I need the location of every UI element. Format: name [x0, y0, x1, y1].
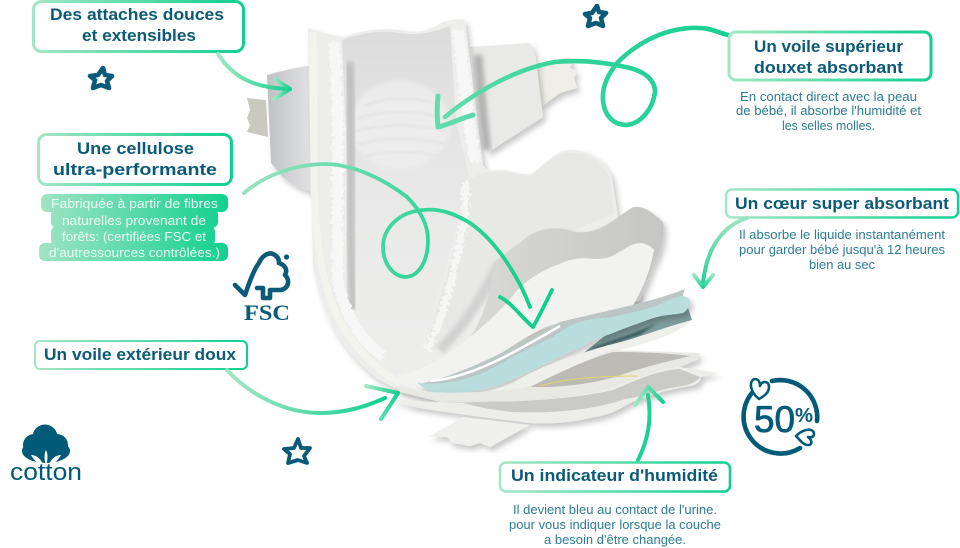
heading: Un indicateur d'humidité — [511, 467, 718, 485]
heading: Des attaches douces — [50, 6, 224, 24]
hearts — [751, 379, 814, 445]
left tab — [247, 98, 268, 137]
arrow: voile supérieur — [437, 28, 728, 127]
text block: cellulose description: forêts: (certifiées FSC et — [62, 230, 207, 244]
right tab — [535, 57, 577, 107]
text block: indicateur description: Il devient bleu au contact de l'urine. — [513, 503, 717, 517]
arrow: attaches — [218, 54, 290, 99]
grey sheet above core — [420, 289, 685, 385]
box — [38, 134, 232, 184]
left cuff shadow — [349, 62, 353, 310]
icon: 50% badge: % — [795, 405, 813, 427]
text block: voile supérieur description: les selles molles. — [782, 119, 875, 133]
cotton wordmark: cotton — [10, 459, 82, 486]
text block: cœur description — [739, 228, 946, 272]
callout: voile supérieur: douxet absorbant — [754, 59, 904, 77]
text block: cœur description: pour garder bébé jusqu'à 12 heures — [739, 243, 945, 257]
icon: star top centre — [585, 6, 606, 26]
FSC wordmark: FSC — [244, 300, 290, 325]
outer edge strip — [313, 32, 415, 390]
registered mark — [284, 254, 289, 260]
highlight sliver — [430, 326, 560, 381]
arrow: cœur — [694, 218, 747, 287]
leaves — [31, 450, 61, 466]
arrow: cellulose — [244, 164, 552, 327]
box — [500, 462, 730, 492]
green highlight — [39, 194, 228, 261]
box — [729, 32, 931, 80]
text block: cellulose description — [39, 194, 228, 261]
text block: indicateur description: pour vous indiquer lorsque la couche — [509, 518, 721, 532]
arrow: indicateur — [635, 387, 663, 460]
heading: Un voile supérieur — [754, 38, 904, 56]
text block: indicateur description: a besoin d'être changée. — [544, 533, 686, 547]
third sheet inner shadow — [530, 352, 690, 387]
box — [34, 2, 244, 52]
heading: Un voile extérieur doux — [44, 346, 237, 364]
bottom sheet inner grey — [463, 369, 700, 412]
white sheet under core — [400, 320, 692, 396]
icon: star top left — [90, 68, 112, 88]
box — [726, 190, 958, 218]
callout: attaches — [34, 2, 244, 52]
central panel — [342, 26, 470, 345]
bottom fastening tab — [429, 417, 530, 447]
valley shadow — [440, 262, 500, 350]
grey wave layer — [430, 207, 664, 385]
callout: cellulose: ultra-performante — [53, 161, 217, 179]
description text: Fabriquée à partir de fibres — [51, 197, 218, 211]
cotton boll — [22, 424, 70, 463]
bottom sheet — [383, 367, 718, 423]
embossed pad — [350, 81, 450, 169]
ring — [744, 380, 817, 453]
callout: voile supérieur — [729, 32, 931, 80]
text block: indicateur description — [509, 503, 721, 547]
callout: indicateur — [500, 462, 730, 492]
third sheet — [394, 350, 700, 402]
text block: cellulose description: naturelles provenant de — [62, 214, 206, 228]
callout: voile extérieur — [35, 341, 247, 369]
icon: star bottom — [284, 439, 310, 463]
text block: cœur description: Il absorbe le liquide instantanément — [739, 228, 946, 242]
icon: 50% badge — [744, 379, 817, 453]
callout: cellulose — [38, 134, 232, 184]
left cuff frill — [334, 42, 383, 356]
white absorbent layer — [398, 243, 654, 388]
tree mark — [235, 253, 288, 298]
text block: cœur description: bien au sec — [809, 258, 875, 272]
diaper illustration — [247, 19, 718, 447]
text block: voile supérieur description: En contact direct avec la peau — [740, 90, 917, 104]
wetness indicator line — [540, 376, 637, 386]
box — [35, 341, 247, 369]
text block: voile supérieur description — [736, 90, 922, 133]
percent value: 50 — [754, 399, 795, 440]
icon: FSC logo — [235, 253, 290, 325]
main body — [308, 19, 640, 397]
right cuff frill — [458, 30, 476, 162]
callout: attaches: et extensibles — [82, 27, 196, 45]
text block: voile supérieur description: de bébé, il absorbe l'humidité et — [736, 104, 922, 118]
callout: cœur — [726, 190, 958, 218]
right wing — [470, 43, 543, 153]
heading: Un cœur super absorbant — [735, 195, 950, 213]
right flap — [425, 153, 614, 350]
dark shadow under core — [587, 323, 657, 350]
pad stripes — [356, 98, 446, 156]
left wing — [267, 65, 314, 192]
arrow: voile extérieur — [227, 370, 398, 419]
right cuff shadow — [478, 55, 487, 150]
teal shade under core — [580, 308, 692, 356]
text block: cellulose description: d'autressources contrôlées.) — [49, 246, 220, 260]
blue absorbent core — [417, 296, 690, 394]
heading: Une cellulose — [77, 140, 194, 158]
icon: cotton logo — [10, 424, 82, 486]
lower cuff frill — [427, 182, 466, 350]
